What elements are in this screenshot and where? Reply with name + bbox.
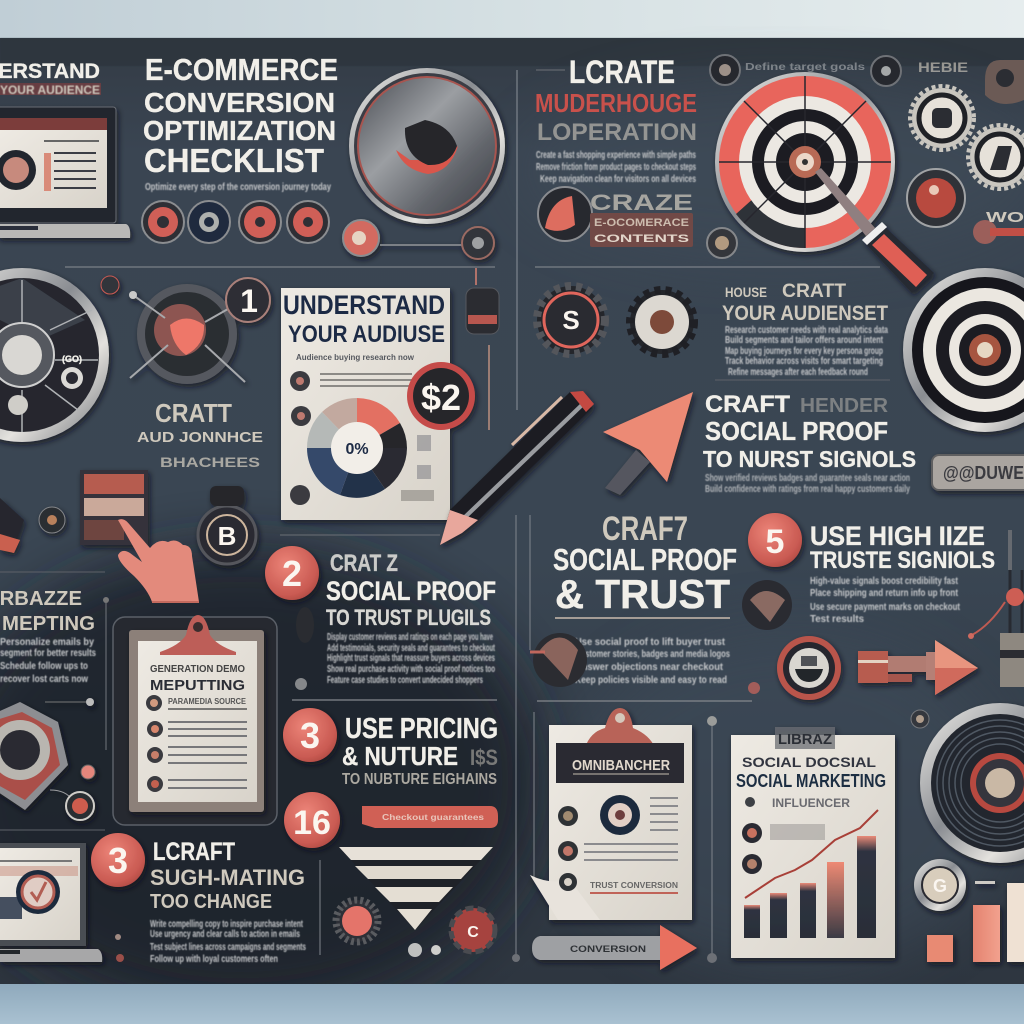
icon: chrome button bottom right: G [933, 876, 947, 896]
step: 3 lcraft: Use urgency and clear calls to action in emails [150, 929, 300, 940]
step: 2 social proof: Add testimonials, security seals and guarantees to checkout [327, 643, 495, 654]
small icons around target: Define target goals [745, 62, 866, 73]
text: craft social proof: SOCIAL PROOF [705, 416, 888, 446]
text: craft social proof: TO NURST SIGNOLS [703, 446, 916, 472]
connector [343, 220, 494, 259]
clipboard: checklist [113, 615, 277, 825]
card: social marketing bar chart: SOCIAL MARKETING [736, 771, 886, 791]
donut chart [307, 398, 407, 498]
text: craft social proof: Show verified reviews badges and guarantee seals near action [705, 473, 910, 484]
step: 3 lcraft: LCRAFT [153, 838, 235, 866]
step: 3 lcraft: 3 [108, 840, 128, 881]
step: 2 social proof: Display customer reviews and ratings on each page you have [327, 632, 493, 643]
step: 5 trust signals: Use secure payment marks on checkout [810, 602, 961, 613]
text: left marketing: MEPTING [2, 613, 95, 635]
icon: chrome knob [343, 68, 505, 259]
title: E-COMMERCE [145, 52, 338, 87]
text: craft your audience: HOUSE [725, 284, 767, 300]
text: craft audience [137, 398, 263, 470]
step: 5 trust signals: Place shipping and return info up front [810, 588, 959, 599]
background wall: top [0, 0, 1024, 40]
card: social marketing bar chart: INFLUENCER [772, 796, 850, 810]
icon: center target heart with number 1 [101, 276, 270, 384]
text: craft social proof: Build confidence with ratings from real happy customers daily [705, 484, 910, 495]
text: left marketing: Personalize emails by [0, 637, 94, 648]
laptop: bottom left [0, 843, 102, 962]
step: 3 use pricing: USE PRICING [345, 713, 498, 745]
text: craft your audience: YOUR AUDIENSET [722, 302, 888, 325]
text: craft social proof and trust: Use social proof to lift buyer trust [575, 637, 726, 648]
heading: create warehouse location [535, 54, 697, 185]
bars [744, 836, 876, 938]
step: 3 use pricing: TO NUBTURE EIGHAINS [342, 771, 497, 788]
sub-block: craze: E-OCOMERACE [594, 217, 689, 229]
text: craft social proof [703, 391, 916, 495]
card: understand your audience [281, 288, 475, 520]
gear icons right: HEBIE [918, 59, 968, 75]
badge: B button: B [218, 521, 236, 551]
text: craft social proof and trust: SOCIAL PROOF [553, 542, 737, 577]
step: 5 trust signals: 5 [766, 523, 784, 561]
clipboard: checklist: GENERATION DEMO [150, 664, 245, 675]
sub-block: craze [538, 187, 693, 247]
icon: salmon cursor arrow [603, 392, 693, 495]
title: CHECKLIST [144, 142, 324, 179]
icon: small emblem [742, 580, 792, 694]
step: 16 banner: Checkout guarantees [382, 813, 485, 822]
icon: red gear button [336, 900, 378, 942]
icon: pen [440, 391, 594, 545]
step: 5 trust signals [748, 513, 995, 625]
step: 3 use pricing: I$S [470, 745, 498, 770]
text: craft social proof and trust: Answer objections near checkout [575, 662, 724, 673]
gear icons right: WO [986, 209, 1024, 226]
title: Optimize every step of the conversion journey today [145, 182, 331, 193]
badge: round icon [777, 636, 841, 700]
text: craft social proof and trust: & TRUST [555, 571, 730, 617]
small icons around target [707, 55, 901, 258]
icon: lock on cord [466, 268, 499, 430]
step: 2 social proof: Show real purchase activity with social proof notices too [327, 664, 495, 675]
text: craft audience: BHACHEES [160, 454, 260, 470]
background wall: bottom [0, 984, 1024, 1024]
text: craft social proof and trust: CRAF7 [602, 510, 688, 548]
badge 2: $2 [421, 377, 461, 418]
gear badges: row 2: S [562, 305, 580, 335]
heading: create warehouse location: Keep navigation clean for visitors on all devices [540, 174, 696, 185]
step: 5 trust signals: High-value signals boost credibility fast [810, 576, 959, 587]
icon: pointing hand [118, 519, 199, 602]
arrow with bars [858, 640, 978, 695]
step: 2 social proof: TO TRUST PLUGILS [326, 605, 491, 630]
pill button [932, 455, 1024, 490]
step: 3 use pricing: 3 [300, 715, 320, 756]
arrow: pill with label: CONVERSION [570, 944, 646, 954]
icon: shield wheel [0, 698, 95, 820]
step: 2 social proof: CRAT Z [330, 550, 398, 577]
text: craft your audience: Map buying journeys for every key persona group [725, 346, 883, 357]
heading: create warehouse location: LOPERATION [537, 119, 697, 146]
step: 16 banner: 16 [293, 804, 331, 842]
step: 5 trust signals: Test results [810, 614, 864, 625]
laptop: top left [0, 107, 130, 238]
text: craft your audience: Research customer needs with real analytics data [725, 325, 888, 336]
gear icons right [907, 59, 1024, 244]
text: craft your audience: Build segments and tailor offers around intent [725, 335, 883, 346]
icon: buttons panel [0, 470, 148, 553]
badge 1 [226, 278, 270, 322]
step: 3 lcraft: Follow up with loyal customers often [150, 954, 278, 965]
text: craft your audience: Refine messages after each feedback round [728, 367, 868, 378]
arrow: pill with label [532, 925, 697, 970]
heading: create warehouse location: Create a fast shopping experience with simple paths [536, 150, 696, 161]
heading: understand [0, 60, 101, 97]
text: craft your audience [722, 281, 888, 378]
icon: dartboard target [715, 72, 934, 293]
heading: understand: YOUR AUDIENCE [0, 83, 100, 97]
badge 1: 1 [240, 283, 258, 319]
step: 5 trust signals: TRUSTE SIGNIOLS [810, 547, 995, 574]
step: 2 social proof: Highlight trust signals that reassure buyers across devices [327, 653, 495, 664]
icon: striped funnel [339, 847, 493, 930]
icon: red seal: C [467, 924, 479, 941]
icon row: four circles [142, 201, 329, 243]
clipboard: checklist: PARAMEDIA SOURCE [168, 697, 247, 706]
text: craft social proof and trust [530, 510, 737, 687]
icon: red seal [408, 908, 495, 957]
step: 2 social proof: Feature case studies to convert undecided shoppers [327, 675, 483, 686]
clipboard: omnibus document: OMNIBANCHER [572, 757, 670, 774]
clipboard: checklist: MEPUTTING [150, 677, 245, 694]
card: social marketing bar chart: LIBRAZ [778, 731, 832, 748]
dart [815, 168, 934, 293]
bar chart: bottom right [927, 881, 1024, 962]
text: craft your audience: CRATT [782, 281, 846, 302]
icon: chrome button bottom right [914, 859, 966, 911]
step: 3 lcraft: SUGH-MATING [150, 865, 305, 890]
text: left marketing: segment for better results [0, 648, 96, 659]
heading: create warehouse location: MUDERHOUGE [535, 88, 697, 118]
icon: left dial: (GO) [62, 354, 82, 364]
step: 2 social proof [265, 546, 496, 690]
step: 2 social proof: SOCIAL PROOF [326, 576, 496, 606]
small button [66, 792, 94, 820]
step: 3 lcraft [91, 833, 306, 965]
step: 3 lcraft: TOO CHANGE [150, 891, 272, 913]
text: craft social proof and trust: Customer stories, badges and media logos [575, 649, 730, 660]
title [143, 52, 338, 193]
text: craft audience: AUD JONNHCE [137, 429, 263, 446]
text: left marketing: Schedule follow ups to [0, 661, 88, 672]
card: understand your audience: Audience buying research now [296, 353, 415, 362]
step: 3 use pricing: & NUTURE [342, 741, 458, 771]
step: 3 lcraft: Write compelling copy to inspire purchase intent [150, 919, 303, 930]
step: 16 banner [284, 792, 498, 848]
clip [160, 615, 236, 655]
step: 3 lcraft: Test subject lines across campaigns and segments [150, 942, 306, 953]
text: craft audience: CRATT [155, 398, 232, 428]
sub-block: craze: CRAZE [590, 190, 693, 215]
sub-block: craze: CONTENTS [594, 233, 689, 245]
step: 3 use pricing [283, 708, 498, 788]
title: OPTIMIZATION [143, 115, 336, 146]
icon: target right [903, 268, 1024, 432]
clip [585, 708, 655, 748]
text: craft social proof: HENDER [800, 395, 889, 417]
clipboard: omnibus document: TRUST CONVERSION [590, 881, 678, 890]
text: left marketing [0, 588, 109, 750]
card: social marketing bar chart [731, 727, 895, 958]
icon: device right [968, 530, 1024, 687]
step: 2 social proof: 2 [282, 553, 302, 594]
icon: right dial [920, 703, 1024, 863]
card: understand your audience: UNDERSTAND [283, 290, 445, 320]
text: craft social proof: CRAFT [705, 391, 790, 418]
clipboard: omnibus document [530, 708, 692, 920]
badge 2 [407, 362, 475, 430]
heading: create warehouse location: Remove friction from product pages to checkout steps [536, 162, 696, 173]
badge: B button [198, 486, 256, 564]
step: 5 trust signals: USE HIGH IIZE [810, 521, 985, 551]
heading: create warehouse location: LCRATE [569, 54, 675, 90]
text: craft social proof and trust: Keep policies visible and easy to read [575, 675, 727, 686]
donut chart: 0% [345, 441, 369, 458]
text: craft your audience: Track behavior across visits for smart targeting [725, 356, 883, 367]
small icon: top dot [512, 710, 929, 963]
icon: left dial [0, 268, 109, 442]
title: CONVERSION [144, 87, 335, 118]
card: social marketing bar chart: SOCIAL DOCSIAL [742, 754, 876, 770]
text: left marketing: recover lost carts now [0, 674, 88, 685]
card: understand your audience: YOUR AUDIUSE [288, 321, 445, 348]
gear badges: row 2 [537, 286, 694, 354]
